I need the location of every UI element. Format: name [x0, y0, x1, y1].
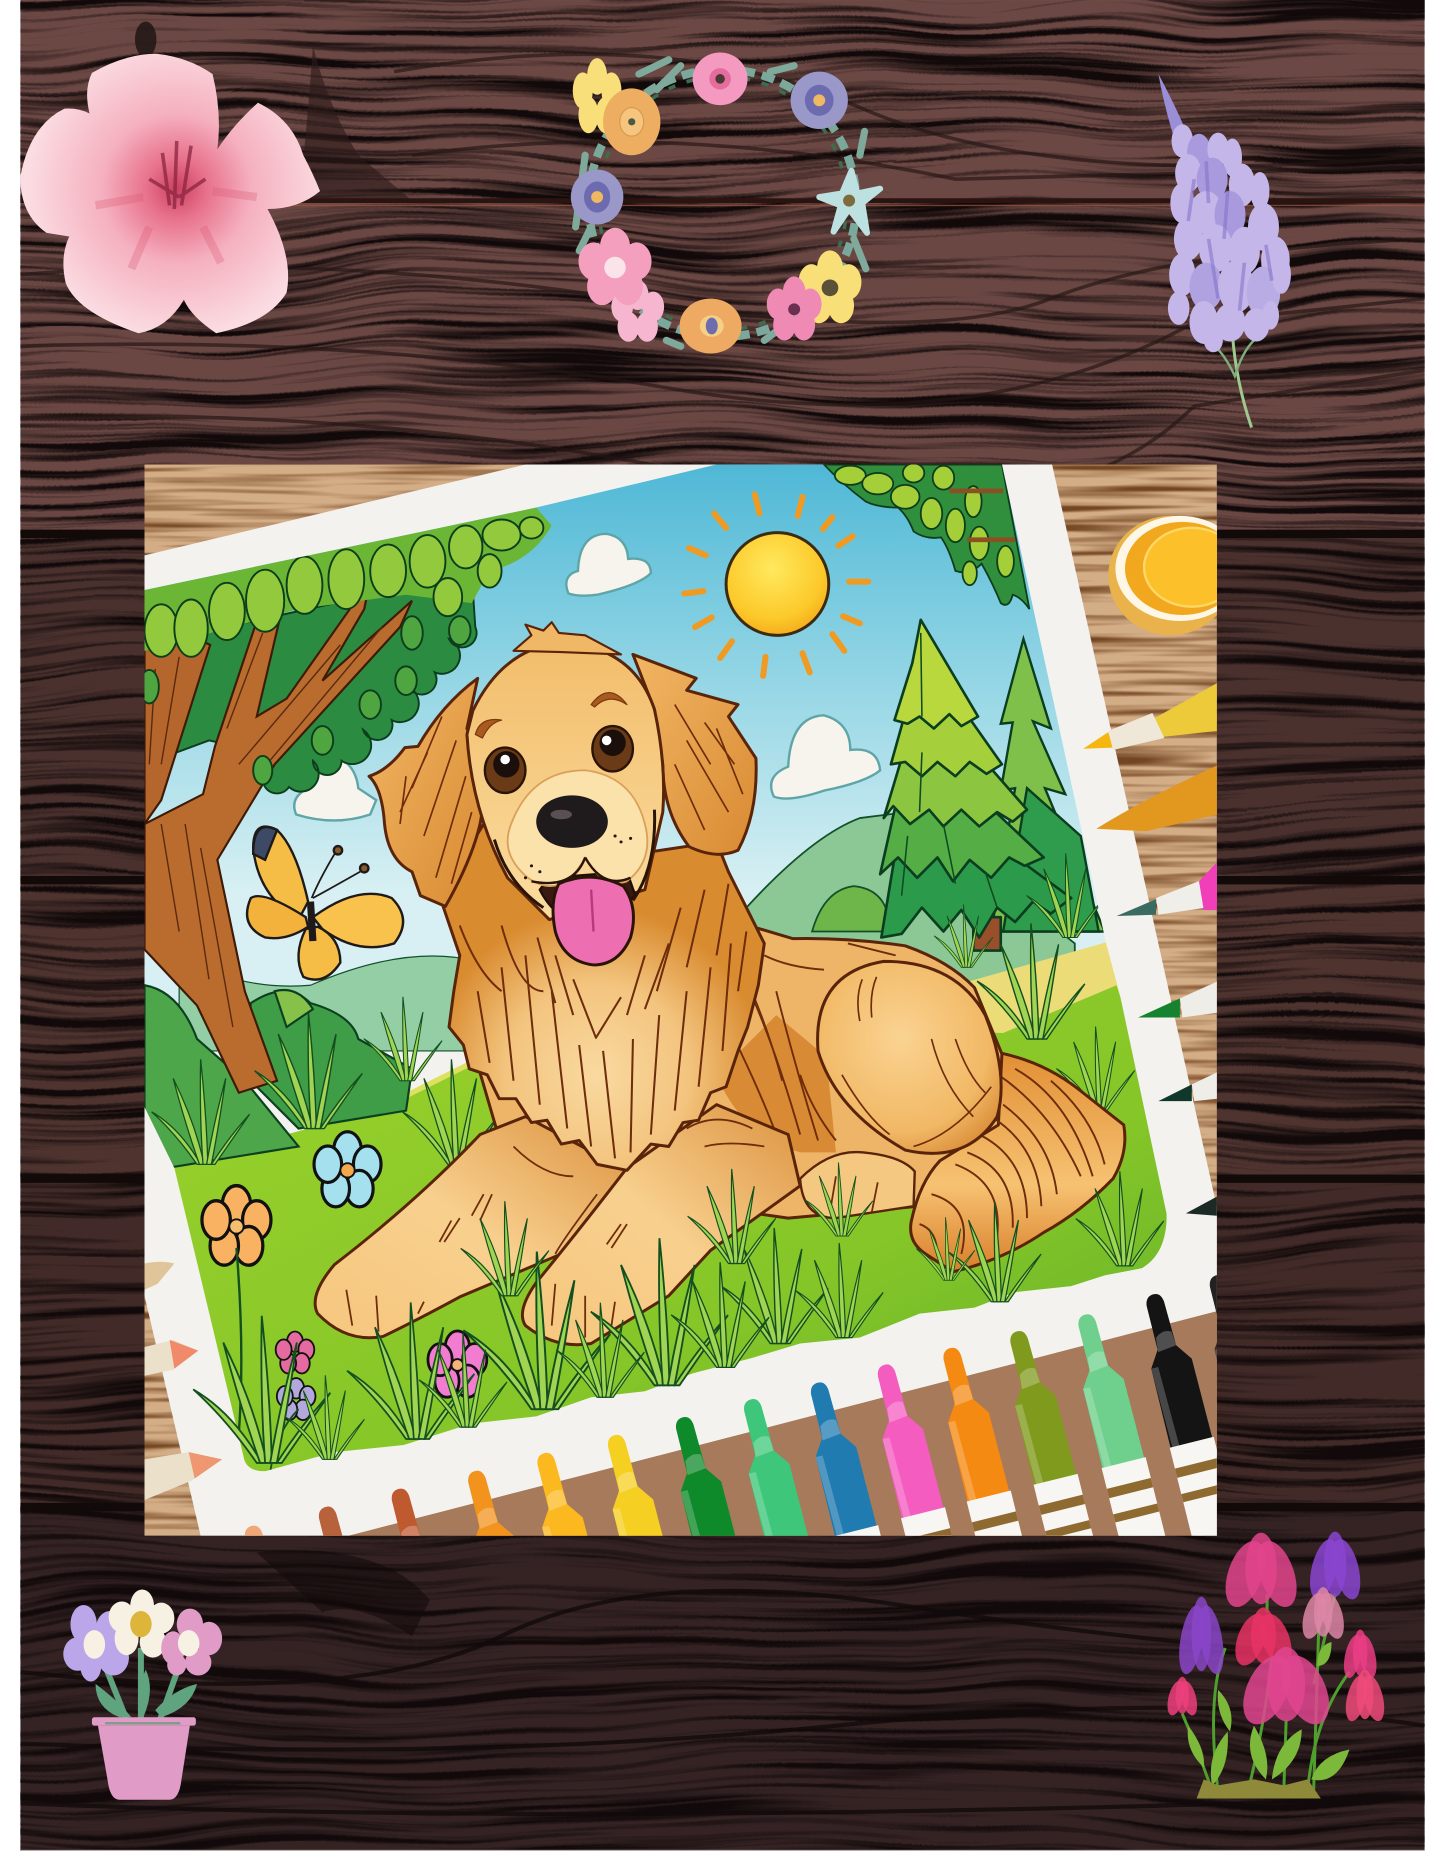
tongue	[553, 877, 633, 965]
blue marker	[797, 1377, 922, 1712]
peach crayon left low	[144, 1452, 222, 1500]
coloured art area	[140, 463, 1182, 1493]
tail	[911, 1053, 1125, 1272]
orange crayon right	[1096, 766, 1217, 831]
icon: tulip bouquet	[1164, 1532, 1388, 1798]
white paper sheet	[144, 465, 1217, 1536]
pink rose	[693, 53, 748, 105]
tree trunk and branches	[144, 567, 412, 1093]
smile line	[494, 810, 655, 908]
peach marker	[231, 1520, 356, 1856]
icon: pink watercolour flower	[20, 54, 320, 333]
grass base	[1197, 1779, 1321, 1798]
background grass tufts	[152, 853, 1135, 1164]
orange marker	[454, 1465, 579, 1801]
dark foliage mass	[177, 594, 478, 794]
icon: lavender sprig	[1158, 74, 1291, 428]
lilac flower	[63, 1605, 129, 1681]
small left flower	[1164, 1677, 1200, 1718]
pale blue flower	[819, 171, 880, 233]
muzzle	[508, 770, 647, 886]
butterfly	[247, 827, 403, 980]
yellow daisy	[573, 58, 621, 133]
lime foliage canopy	[140, 508, 552, 785]
wooden desk	[144, 465, 1217, 1536]
dark marker right	[1158, 1072, 1217, 1101]
black marker	[1133, 1288, 1258, 1624]
pink flower	[428, 1331, 487, 1397]
pink flower	[161, 1609, 222, 1675]
foreground grass	[193, 1162, 1164, 1463]
mouth interior	[540, 872, 635, 922]
small pine tree	[991, 639, 1105, 931]
light green marker	[1065, 1309, 1190, 1644]
distant hills	[179, 812, 1075, 1051]
purple flower left	[571, 170, 623, 225]
cloud left	[294, 755, 376, 820]
body	[456, 920, 1003, 1218]
tall pine tree	[880, 620, 1071, 951]
dark marker	[1196, 1269, 1321, 1605]
magenta flower	[276, 1332, 314, 1373]
pink blossom left	[578, 228, 652, 305]
lilac flower	[277, 1378, 315, 1420]
yellow aster	[799, 250, 861, 323]
pot	[92, 1717, 196, 1800]
row of markers along bottom	[231, 1269, 1321, 1856]
sky	[144, 465, 1124, 1038]
left ear	[369, 678, 483, 906]
leaves	[1188, 1642, 1349, 1785]
pink aster	[767, 276, 822, 340]
leaves	[96, 1670, 197, 1717]
back leg fur strokes	[728, 943, 896, 1140]
right front leg	[522, 1105, 800, 1345]
head and face	[467, 622, 664, 965]
whisker dots	[525, 836, 631, 878]
purple top flower	[1305, 1532, 1366, 1604]
back paw	[800, 1152, 915, 1218]
orange rose	[680, 299, 742, 353]
magenta flower right	[1340, 1630, 1380, 1681]
top-right foliage	[824, 463, 1029, 609]
nose	[536, 795, 608, 848]
wood under markers	[349, 1311, 1217, 1536]
purple left flower	[1174, 1597, 1228, 1679]
rust marker	[378, 1483, 503, 1819]
blue flower	[314, 1132, 381, 1207]
left front leg	[315, 1117, 627, 1338]
terracotta marker	[305, 1501, 430, 1836]
white flower	[109, 1590, 174, 1658]
amber marker	[524, 1447, 649, 1783]
orange marker 2	[930, 1342, 1055, 1678]
peach crayon left mid	[144, 1340, 198, 1376]
yellow marker right	[1083, 683, 1217, 750]
green marker right	[1138, 982, 1217, 1017]
chest mane	[439, 824, 764, 1170]
red flower	[1229, 1607, 1298, 1669]
mint marker	[730, 1394, 855, 1729]
stems	[105, 1648, 179, 1720]
yellow paint pot	[1108, 516, 1244, 635]
stems	[1182, 1594, 1349, 1791]
beige crayon left top	[144, 1262, 174, 1290]
lime-yellow marker	[594, 1429, 719, 1765]
olive marker	[997, 1325, 1122, 1661]
cloud right	[771, 715, 880, 799]
pink marker	[864, 1359, 989, 1694]
orange flower	[202, 1186, 271, 1265]
pink-grey marker right	[1117, 862, 1217, 916]
ground flowers	[202, 1132, 487, 1475]
illustration photo: colouring page with dog	[144, 464, 1217, 1536]
haunch	[818, 961, 1001, 1153]
yellow path	[970, 942, 1122, 1033]
green marker	[662, 1411, 787, 1747]
grass field	[144, 985, 1182, 1493]
sun	[684, 494, 868, 676]
left eye	[485, 748, 525, 793]
dog	[315, 622, 1125, 1345]
dark marker lower right	[1186, 1197, 1217, 1216]
left bushes	[144, 985, 412, 1168]
head tuft	[514, 622, 621, 654]
icon: floral wreath	[571, 53, 880, 353]
right flower	[1342, 1670, 1388, 1724]
pink blossom lower	[611, 280, 664, 342]
right eye	[592, 726, 633, 771]
big pink tulip	[1234, 1647, 1338, 1729]
cloud top	[566, 534, 651, 596]
purple flower	[791, 72, 848, 129]
eyebrows	[475, 693, 627, 738]
icon: potted flowers	[63, 1590, 222, 1800]
pink top tulip	[1218, 1533, 1304, 1612]
orange flower	[603, 88, 660, 155]
right ear	[633, 654, 756, 854]
rose pink flower	[1298, 1587, 1348, 1642]
